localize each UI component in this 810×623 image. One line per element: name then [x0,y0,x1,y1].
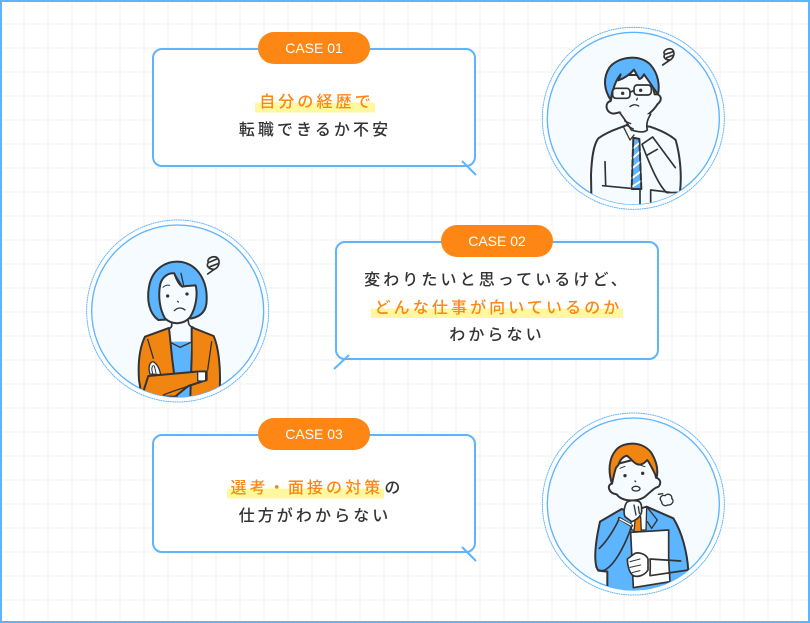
case 02 text: 変わりたいと思っているけど、 [364,266,630,290]
case 02 text: わからない [449,321,545,345]
case 02 badge: CASE 02 [468,233,526,249]
illustration: worried woman with crossed arms [87,220,269,410]
panel: case 01 speech bubble [152,48,476,167]
panel: case 02 speech bubble [335,241,659,360]
case 03 badge: CASE 03 [285,426,343,442]
case 02 text [364,266,630,345]
case 03 text [227,474,403,526]
case 02 text: どんな仕事が向いているのか [375,294,622,318]
case 01 text: 自分の経歴で [259,88,374,112]
case 01 text: 転職できるか不安 [239,116,391,140]
illustration: worried man with glasses [542,27,724,215]
case 03 badge [258,418,370,450]
case 01 badge: CASE 01 [285,40,343,56]
panel: case 03 speech bubble [152,434,476,553]
case 02 badge [441,225,553,257]
case 03 text: 選考・面接の対策の [231,474,403,498]
case 01 badge [258,32,370,64]
case 03 text: 仕方がわからない [239,502,391,526]
illustration: worried man in suit holding a document [542,413,724,598]
case 01 text [239,88,391,140]
